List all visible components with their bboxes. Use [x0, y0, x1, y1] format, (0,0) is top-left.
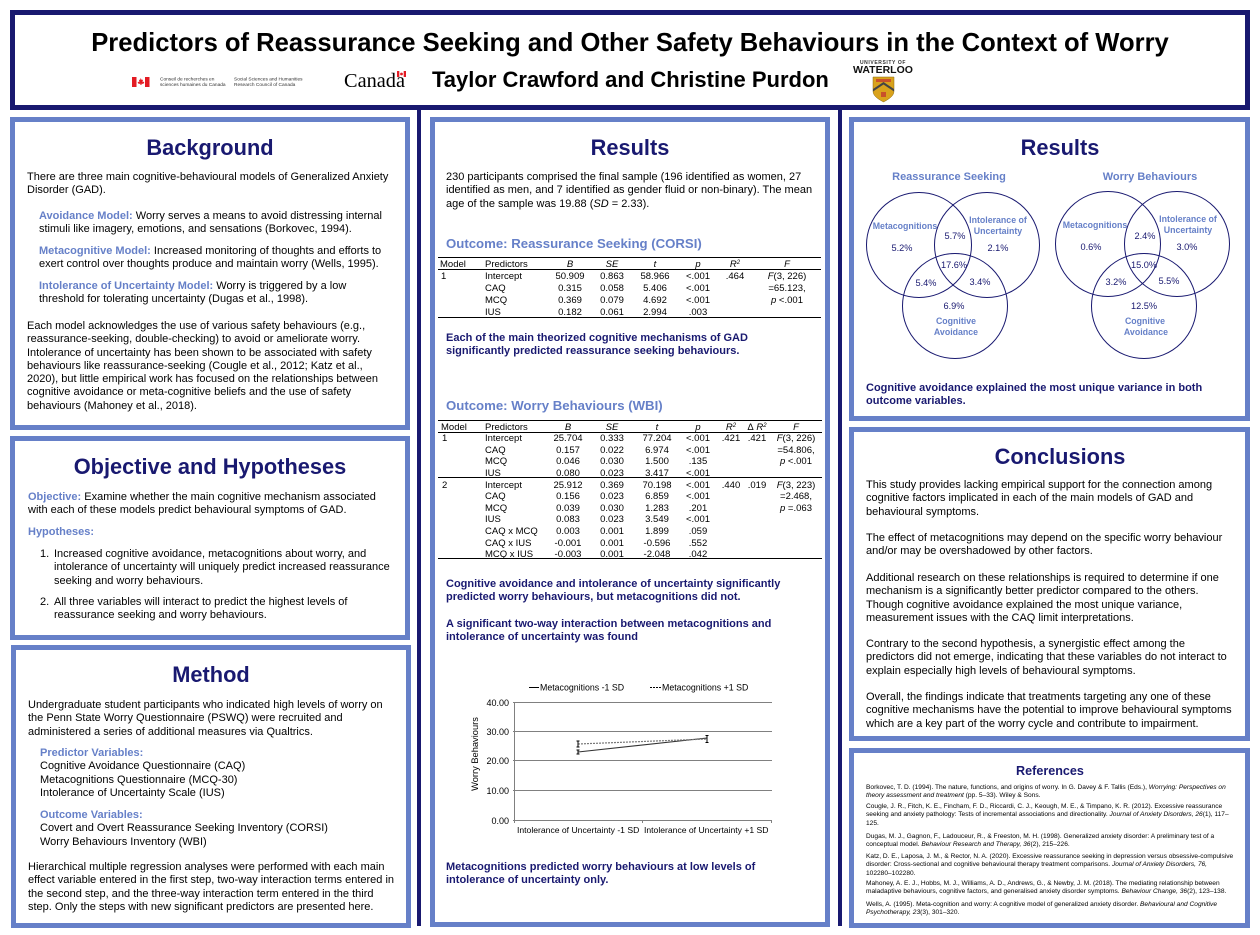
table: reassurance seeking regression: <.001	[686, 271, 710, 282]
text: conclusion 5	[866, 691, 1232, 730]
text: safety behaviours: 2020), but little empirical work has focused on the relationships between	[27, 373, 378, 385]
text: sample: age of the sample was 19.88 (SD = 2.33).	[446, 198, 649, 210]
table: worry behaviours regression: F(3, 226)	[777, 433, 815, 444]
table: reassurance seeking regression: CAQ	[485, 283, 506, 294]
table: worry behaviours regression: -0.003	[555, 549, 581, 560]
line chart: interaction: 40.00	[486, 698, 509, 708]
reference: Katz: disorder: Cross-sectional and cognitive behavioural therapy treatment comparisons. Journal of Anxiety Disorders, 76,	[866, 861, 1207, 868]
text: safety behaviours: reassurance-seeking, double-checking) to avoid or ameliorate worry.	[27, 333, 360, 345]
table: worry behaviours regression: Δ R	[747, 422, 763, 433]
text: intolerance model	[39, 280, 346, 305]
text: reassurance finding	[446, 332, 748, 357]
table: reassurance seeking regression: 50.909	[555, 271, 585, 282]
table: worry behaviours regression: =54.806,	[777, 445, 815, 456]
heading: outcome worry behaviours: Outcome: Worry Behaviours (WBI)	[446, 398, 663, 413]
table: worry behaviours regression: 6.859	[645, 491, 669, 502]
heading: references: References	[1016, 764, 1084, 778]
table: worry behaviours regression: SE	[606, 422, 619, 433]
table: reassurance seeking regression: t	[654, 259, 657, 270]
table: worry behaviours regression: p	[694, 422, 701, 433]
text: objective	[28, 491, 376, 516]
table: reassurance seeking regression: MCQ	[485, 295, 507, 306]
table: worry behaviours regression: <.001	[686, 480, 710, 491]
logo: SSHRC	[132, 76, 303, 88]
table: worry behaviours regression: 77.204	[642, 433, 672, 444]
table: worry behaviours regression: MCQ x IUS	[485, 549, 533, 560]
table: worry behaviours regression: 0.083	[556, 514, 580, 525]
text: chart finding: Metacognitions predicted worry behaviours at low levels of	[446, 861, 755, 873]
text: analysis	[28, 861, 394, 913]
table: worry behaviours regression: 0.157	[556, 445, 580, 456]
text: venn finding	[866, 382, 1202, 407]
table: reassurance seeking regression: 0.058	[600, 283, 624, 294]
table: worry behaviours regression: CAQ x MCQ	[485, 526, 538, 537]
text: conclusion 4: Contrary to the second hypothesis, a synergistic effect among the	[866, 638, 1185, 650]
table: reassurance seeking regression: .464	[726, 271, 744, 282]
reference: Cougle: 125.	[866, 820, 879, 827]
column divider left	[417, 110, 421, 926]
venn diagram: worry behaviours: 2.4%	[1135, 231, 1155, 241]
text: intolerance model: threshold for tolerating uncertainty (Dugas et al., 1998).	[39, 293, 308, 305]
table: worry behaviours regression: 0.003	[556, 526, 580, 537]
venn diagram: worry behaviours: Intolerance of	[1159, 214, 1217, 224]
table: worry behaviours regression: MCQ	[485, 456, 507, 467]
text: sample	[446, 171, 812, 210]
logo: Canada wordmark: Canada	[344, 70, 405, 92]
table: reassurance seeking regression: 0.182	[558, 307, 582, 318]
text: chart finding: intolerance of uncertainty only.	[446, 874, 608, 886]
table: worry behaviours regression: CAQ	[485, 491, 506, 502]
text: metacognitive model: exert control over thoughts produce and maintain worry (Wells, 1995).	[39, 258, 379, 270]
header banner	[10, 10, 1250, 110]
line chart: interaction: Worry Behaviours	[470, 717, 480, 791]
table: worry behaviours regression: <.001	[686, 468, 710, 479]
table: worry behaviours regression: 0.001	[600, 538, 624, 549]
text: conclusion 2: The effect of metacognitions may depend on the specific worry behaviour	[866, 532, 1222, 544]
heading: results middle: Results	[591, 135, 669, 160]
table: reassurance seeking regression: Intercept	[485, 271, 522, 282]
reference: Katz	[866, 853, 1233, 877]
table: worry behaviours regression: 0.333	[600, 433, 624, 444]
text: safety behaviours	[27, 320, 378, 412]
text: reassurance finding: significantly predicted reassurance seeking behaviours.	[446, 345, 739, 357]
table: worry behaviours regression	[438, 420, 822, 560]
table: worry behaviours regression: 0.022	[600, 445, 624, 456]
panel: references	[849, 748, 1250, 928]
reference: Mahoney	[866, 880, 1226, 895]
venn diagram: reassurance seeking: 6.9%	[944, 301, 964, 311]
table: worry behaviours regression: p =.063	[779, 503, 812, 514]
table: worry behaviours regression: F	[793, 422, 800, 433]
heading: background: Background	[146, 135, 274, 160]
table: worry behaviours regression: 0.023	[600, 491, 624, 502]
table: worry behaviours regression: 0.039	[556, 503, 580, 514]
table: worry behaviours regression: 0.001	[600, 526, 624, 537]
table: reassurance seeking regression: 2	[736, 260, 741, 266]
table: worry behaviours regression: 1.500	[645, 456, 669, 467]
text: analysis: Hierarchical multiple regression analyses were performed with each main	[28, 861, 384, 873]
text: conclusion 2: and/or may be overshadowed by other factors.	[866, 545, 1093, 557]
text: reassurance finding: Each of the main theorized cognitive mechanisms of GAD	[446, 332, 748, 344]
table: worry behaviours regression: CAQ x IUS	[485, 538, 531, 549]
reference: Dugas: conceptual model. Behaviour Research and Therapy, 36(2), 215–226.	[866, 841, 1070, 848]
table: reassurance seeking regression: <.001	[686, 283, 710, 294]
venn diagram: worry behaviours: Worry Behaviours	[1103, 171, 1197, 183]
venn diagram: worry behaviours: 3.0%	[1177, 242, 1197, 252]
text: safety behaviours: cognitive avoidance or meta-cognitive beliefs and the use of safety	[27, 386, 351, 398]
authors: Taylor Crawford and Christine Purdon	[432, 67, 829, 92]
column divider right	[838, 110, 842, 926]
text: predictor variables: Intolerance of Uncertainty Scale (IUS)	[40, 787, 225, 799]
text: venn finding: outcome variables.	[866, 395, 966, 407]
text: metacognitive model	[39, 245, 381, 270]
text: conclusion 3: Additional research on these relationships is required to determine if one	[866, 572, 1219, 584]
venn diagram: reassurance seeking: 17.6%	[941, 260, 967, 270]
text: safety behaviours: behaviours (Mahoney et al., 2018).	[27, 400, 197, 412]
table: worry behaviours regression: .552	[689, 538, 707, 549]
text: venn finding: Cognitive avoidance explained the most unique variance in both	[866, 382, 1202, 394]
reference: Borkovec: Borkovec, T. D. (1994). The nature, functions, and origins of worry. In G. Davey & F. Tallis (Eds.), Worrying: Perspectives on	[866, 784, 1226, 791]
text: hypothesis 2	[40, 596, 348, 621]
line chart: interaction: 30.00	[486, 727, 509, 737]
venn diagram: worry behaviours: 0.6%	[1081, 242, 1101, 252]
reference: Wells	[866, 901, 1217, 916]
text: intolerance of uncertainty will uniquely predict increased reassurance	[54, 561, 390, 573]
table: reassurance seeking regression: 2.994	[643, 307, 667, 318]
text: conclusion 4: predictors did not emerge, indicating that these variables do not interact to	[866, 651, 1227, 663]
table: worry behaviours regression: 1.899	[645, 526, 669, 537]
reference: Dugas	[866, 833, 1214, 848]
legend: Metacognitions +1 SD	[662, 682, 748, 692]
table: reassurance seeking regression: IUS	[485, 307, 501, 318]
table: worry behaviours regression: Intercept	[485, 480, 522, 491]
table: reassurance seeking regression: p <.001	[770, 295, 803, 306]
text: conclusion 3	[866, 572, 1219, 624]
venn diagram: reassurance seeking: Reassurance Seeking	[892, 171, 1006, 183]
text: GAD intro	[27, 171, 388, 196]
table: worry behaviours regression: .135	[689, 456, 707, 467]
logo: SSHRC: sciences humaines du Canada	[160, 82, 226, 88]
table: worry behaviours regression: p <.001	[779, 456, 812, 467]
table: worry behaviours regression: 0.001	[600, 549, 624, 560]
venn diagram: reassurance seeking: 5.2%	[892, 243, 912, 253]
table: reassurance seeking regression	[438, 257, 821, 318]
text: predictor variables: Metacognitions Questionnaire (MCQ-30)	[40, 774, 237, 786]
text: sample: 230 participants comprised the final sample (196 identified as women, 27	[446, 171, 801, 183]
text: outcome variables: Covert and Overt Reassurance Seeking Inventory (CORSI)	[40, 822, 328, 834]
panel: objective and hypotheses	[10, 436, 410, 640]
table: worry behaviours regression: 0.023	[600, 514, 624, 525]
text: analysis: step. Only the steps with new significant predictors are presented here.	[28, 901, 373, 913]
table: worry behaviours regression: -0.596	[644, 538, 670, 549]
text: intolerance model: Intolerance of Uncertainty Model: Worry is triggered by a low	[39, 280, 346, 292]
text: conclusion 4	[866, 638, 1227, 677]
table: worry behaviours regression: <.001	[686, 514, 710, 525]
table: reassurance seeking regression: 5.406	[643, 283, 667, 294]
table: worry behaviours regression: 3.417	[645, 468, 669, 479]
text: metacognitive model: Metacognitive Model: Increased monitoring of thoughts and efforts to	[39, 245, 381, 257]
text: interaction finding: intolerance of uncertainty was found	[446, 631, 638, 643]
logo: University of Waterloo: UNIVERSITY OF	[860, 60, 906, 66]
text: seeking and worry behaviours.	[54, 575, 203, 587]
line chart: interaction: 20.00	[486, 756, 509, 766]
text: hypothesis 1: 1.	[40, 548, 49, 560]
text: conclusion 3: Though cognitive avoidance explained the most unique variance,	[866, 599, 1182, 611]
text: conclusion 3: mechanism is a significantly better predictor compared to the others.	[866, 585, 1199, 597]
reference: Mahoney: maladaptive behaviours, cognitive factors, and generalised anxiety disorder symptoms. Behaviour Change, 36(2), 123–138.	[866, 888, 1226, 895]
table: worry behaviours regression: .042	[689, 549, 707, 560]
text: avoidance model: stimuli like imagery, emotions, and sensations (Borkovec, 1994).	[39, 223, 352, 235]
table: reassurance seeking regression: F	[784, 259, 791, 270]
logo: SSHRC: Research Council of Canada	[234, 82, 296, 88]
text: analysis: the second step, and the three-way interaction term entered in the third	[28, 888, 373, 900]
table: worry behaviours regression: 2	[762, 423, 767, 429]
table: worry behaviours regression: Model	[441, 422, 467, 433]
logo: SSHRC: Social Sciences and Humanities	[234, 76, 303, 82]
text: reassurance seeking and worry behaviours.	[54, 609, 267, 621]
reference: Dugas: Dugas, M. J., Gagnon, F., Ladouceur, R., & Freeston, M. H. (1998). Generalized anxiety disorder: A preliminary test of a	[866, 833, 1214, 840]
table: worry behaviours regression: 0.156	[556, 491, 580, 502]
text: predictor variables: Cognitive Avoidance Questionnaire (CAQ)	[40, 760, 245, 772]
text: conclusion 5: Overall, the findings indicate that treatments targeting any one of these	[866, 691, 1211, 703]
reference: Wells: Wells, A. (1995). Meta-cognition and worry: A cognitive model of generalized anxiety disorder. Behavioural and Cognitive	[866, 901, 1217, 908]
heading: method: Method	[172, 662, 250, 687]
reference: Katz: 102280–102280.	[866, 870, 916, 877]
text: participants: Undergraduate student participants who indicated high levels of worry on	[28, 699, 383, 711]
table: worry behaviours regression: -0.001	[555, 538, 581, 549]
panel: conclusions	[849, 427, 1250, 741]
text: hypotheses label: Hypotheses:	[28, 526, 94, 538]
venn diagram: reassurance seeking: Metacognitions	[873, 221, 937, 231]
table: reassurance seeking regression: 1	[441, 271, 446, 282]
reference: Cougle	[866, 803, 1229, 827]
text: chart finding	[446, 861, 756, 886]
table: reassurance seeking regression: p	[694, 259, 701, 270]
venn diagram: worry behaviours: 3.2%	[1106, 277, 1126, 287]
text: conclusion 3: measurement issues with the CAQ limit interpretations.	[866, 612, 1134, 624]
text: safety behaviours: behaviours like reassurance-seeking (Cougle et al., 2012; Katz et al.,	[27, 360, 363, 372]
text: outcome variables: Worry Behaviours Inventory (WBI)	[40, 836, 207, 848]
table: reassurance seeking regression: 0.061	[600, 307, 624, 318]
venn diagram: reassurance seeking: Cognitive	[936, 316, 976, 326]
text: avoidance model: Avoidance Model: Worry serves a means to avoid distressing internal	[39, 210, 382, 222]
venn diagram: worry behaviours: 15.0%	[1131, 260, 1157, 270]
table: worry behaviours regression: .059	[689, 526, 707, 537]
table: worry behaviours regression: 25.704	[553, 433, 583, 444]
text: participants: the Penn State Worry Questionnaire (PSWQ) were recruited and	[28, 712, 343, 724]
table: worry behaviours regression: -2.048	[644, 549, 670, 560]
text: predictor variables	[40, 747, 245, 799]
line chart: interaction: 10.00	[486, 786, 509, 796]
table: worry behaviours regression: <.001	[686, 491, 710, 502]
table: reassurance seeking regression: R	[730, 259, 737, 270]
table: worry behaviours regression: 1	[442, 433, 447, 444]
table: worry behaviours regression: .440	[722, 480, 740, 491]
table: reassurance seeking regression: .003	[689, 307, 707, 318]
venn diagram: worry behaviours: 5.5%	[1159, 276, 1179, 286]
venn diagram: reassurance seeking: 5.7%	[945, 231, 965, 241]
table: worry behaviours regression: 0.080	[556, 468, 580, 479]
table: worry behaviours regression: Predictors	[485, 422, 528, 433]
text: safety behaviours: Each model acknowledges the use of various safety behaviours (e.g.,	[27, 320, 365, 332]
text: objective: Objective: Examine whether the main cognitive mechanism associated	[28, 491, 376, 503]
reference: Borkovec: theory assessment and treatment (pp. 5–33). Wiley & Sons.	[866, 792, 1040, 799]
text: All three variables will interact to predict the highest levels of	[54, 596, 347, 608]
table: worry behaviours regression: MCQ	[485, 503, 507, 514]
text: analysis: effect variable entered in the first step, two-way interaction terms entered in	[28, 874, 394, 886]
text: worry finding: Cognitive avoidance and intolerance of uncertainty significantly	[446, 578, 780, 590]
panel: method	[11, 645, 411, 928]
text: conclusion 5: cognitive mechanisms have the potential to improve behavioural symptoms	[866, 704, 1232, 716]
text: sample: identified as men, and 7 identified as gender fluid or non-binary). The mean	[446, 184, 812, 196]
line chart: interaction: Intolerance of Uncertainty -1 SD	[517, 825, 639, 835]
table: worry behaviours regression: 0.023	[600, 468, 624, 479]
logo: University of Waterloo: WATERLOO	[853, 64, 913, 76]
venn diagram: reassurance seeking: Intolerance of	[969, 215, 1027, 225]
text: interaction finding	[446, 618, 771, 643]
heading: outcome reassurance seeking: Outcome: Reassurance Seeking (CORSI)	[446, 236, 702, 251]
venn diagram: worry behaviours: Cognitive	[1125, 316, 1165, 326]
table: worry behaviours regression: 6.974	[645, 445, 669, 456]
table: worry behaviours regression: <.001	[686, 445, 710, 456]
panel: results right	[849, 117, 1250, 421]
text: GAD intro: Disorder (GAD).	[27, 184, 106, 196]
venn diagram: reassurance seeking: 2.1%	[988, 243, 1008, 253]
reference: Katz: Katz, D. E., Laposa, J. M., & Rector, N. A. (2020). Excessive reassurance seeking in depression versus obsessive-compulsive	[866, 853, 1233, 860]
table: reassurance seeking regression: 0.315	[558, 283, 582, 294]
venn diagram: worry behaviours: Avoidance	[1124, 327, 1168, 337]
table: worry behaviours regression: IUS	[485, 468, 501, 479]
heading: results right: Results	[1021, 135, 1099, 160]
venn diagram: reassurance seeking	[866, 171, 1040, 359]
table: reassurance seeking regression: Predictors	[485, 259, 528, 270]
text: interaction finding: A significant two-way interaction between metacognitions and	[446, 618, 771, 630]
table: worry behaviours regression: 2	[442, 480, 447, 491]
text: hypothesis 2: 2.	[40, 596, 49, 608]
table: worry behaviours regression: .421	[748, 433, 766, 444]
text: Increased cognitive avoidance, metacognitions about worry, and	[54, 548, 366, 560]
text: conclusion 1: behavioural symptoms.	[866, 506, 979, 518]
legend: Metacognitions -1 SD	[540, 682, 624, 692]
table: worry behaviours regression: 2	[732, 423, 737, 429]
text: worry finding: predicted worry behaviours, but metacognitions did not.	[446, 591, 741, 603]
reference: Borkovec	[866, 784, 1226, 799]
heading: conclusions: Conclusions	[995, 444, 1125, 469]
table: reassurance seeking regression: B	[567, 259, 574, 270]
table: reassurance seeking regression: 0.863	[600, 271, 624, 282]
panel: background	[10, 117, 410, 430]
table: worry behaviours regression: 0.369	[600, 480, 624, 491]
table: reassurance seeking regression: SE	[606, 259, 619, 270]
logo: University of Waterloo	[853, 60, 913, 102]
line chart: interaction	[470, 682, 772, 835]
text: predictor variables: Predictor Variables:	[40, 747, 143, 759]
venn diagram: reassurance seeking: Uncertainty	[974, 226, 1022, 236]
table: reassurance seeking regression: 0.079	[600, 295, 624, 306]
table: worry behaviours regression: 0.030	[600, 503, 624, 514]
line chart: interaction: 0.00	[491, 816, 509, 826]
table: worry behaviours regression: Intercept	[485, 433, 522, 444]
table: worry behaviours regression: <.001	[686, 433, 710, 444]
text: conclusion 5: which are a key part of the worry cycle and contribute to impairment.	[866, 718, 1199, 730]
venn diagram: worry behaviours	[1055, 171, 1230, 359]
table: reassurance seeking regression: F(3, 226)	[768, 271, 806, 282]
table: reassurance seeking regression: <.001	[686, 295, 710, 306]
text: participants: administered a series of additional measures via Qualtrics.	[28, 726, 313, 738]
venn diagram: worry behaviours: Uncertainty	[1164, 225, 1212, 235]
table: worry behaviours regression: 25.912	[553, 480, 583, 491]
reference: Wells: Psychotherapy, 23(3), 301–320.	[866, 909, 959, 916]
venn diagram: reassurance seeking: Avoidance	[934, 327, 978, 337]
text: avoidance model	[39, 210, 382, 235]
reference: Cougle: Cougle, J. R., Fitch, K. E., Fincham, F. D., Riccardi, C. J., Keough, M. E., & Timpano, K. R. (2012). Excessive reassurance	[866, 803, 1222, 810]
text: hypothesis 1	[40, 548, 390, 587]
reference: Mahoney: Mahoney, A. E. J., Hobbs, M. J., Williams, A. D., Andrews, G., & Newby, J. M. (2018). The mediating relationship between	[866, 880, 1220, 887]
text: outcome variables: Outcome Variables:	[40, 809, 143, 821]
table: worry behaviours regression: =2.468,	[780, 491, 812, 502]
venn diagram: worry behaviours: Metacognitions	[1063, 220, 1127, 230]
text: safety behaviours: Intolerance of uncertainty has been shown to be associated with safety	[27, 347, 372, 359]
text: outcome variables	[40, 809, 328, 848]
table: worry behaviours regression: .019	[748, 480, 766, 491]
legend	[529, 682, 748, 692]
table: reassurance seeking regression: 58.966	[640, 271, 670, 282]
table: worry behaviours regression: CAQ	[485, 445, 506, 456]
table: reassurance seeking regression: 0.369	[558, 295, 582, 306]
venn diagram: reassurance seeking: 3.4%	[970, 277, 990, 287]
venn diagram: worry behaviours: 12.5%	[1131, 301, 1157, 311]
text: GAD intro: There are three main cognitive-behavioural models of Generalized Anxiety	[27, 171, 388, 183]
reference: Cougle: seeking and anxiety pathology: Tests of incremental associations and directionality. Journal of Anxiety Disorders, 26(1), 117–	[866, 811, 1229, 818]
table: worry behaviours regression: 1.283	[645, 503, 669, 514]
table: reassurance seeking regression: =65.123,	[768, 283, 806, 294]
text: worry finding	[446, 578, 780, 603]
table: worry behaviours regression: R	[726, 422, 733, 433]
title: Predictors of Reassurance Seeking and Other Safety Behaviours in the Context of Worry	[91, 29, 1169, 57]
panel: results middle	[430, 117, 830, 927]
table: reassurance seeking regression: Model	[440, 259, 466, 270]
table: worry behaviours regression: B	[565, 422, 572, 433]
logo: SSHRC: Conseil de recherches en	[160, 76, 215, 82]
table: worry behaviours regression: IUS	[485, 514, 501, 525]
text: conclusion 1	[866, 479, 1212, 518]
venn diagram: reassurance seeking: 5.4%	[916, 278, 936, 288]
text: objective: with each of these models predict behavioural symptoms of GAD.	[28, 504, 347, 516]
table: worry behaviours regression: 70.198	[642, 480, 672, 491]
table: reassurance seeking regression: 4.692	[643, 295, 667, 306]
text: conclusion 1: cognitive factors implicated in each of the main models of GAD and	[866, 492, 1193, 504]
table: worry behaviours regression: 3.549	[645, 514, 669, 525]
heading: objective and hypotheses: Objective and Hypotheses	[74, 454, 346, 479]
table: worry behaviours regression: .201	[689, 503, 707, 514]
table: worry behaviours regression: F(3, 223)	[777, 480, 815, 491]
table: worry behaviours regression: .421	[722, 433, 740, 444]
text: participants	[28, 699, 383, 738]
text: conclusion 1: This study provides lacking empirical support for the connection among	[866, 479, 1212, 491]
text: conclusion 4: explain especially high levels of behavioural symptoms.	[866, 665, 1136, 677]
table: worry behaviours regression: t	[656, 422, 659, 433]
line chart: interaction: Intolerance of Uncertainty +1 SD	[644, 825, 768, 835]
table: worry behaviours regression: 0.046	[556, 456, 580, 467]
text: conclusion 2	[866, 532, 1222, 557]
table: worry behaviours regression: 0.030	[600, 456, 624, 467]
